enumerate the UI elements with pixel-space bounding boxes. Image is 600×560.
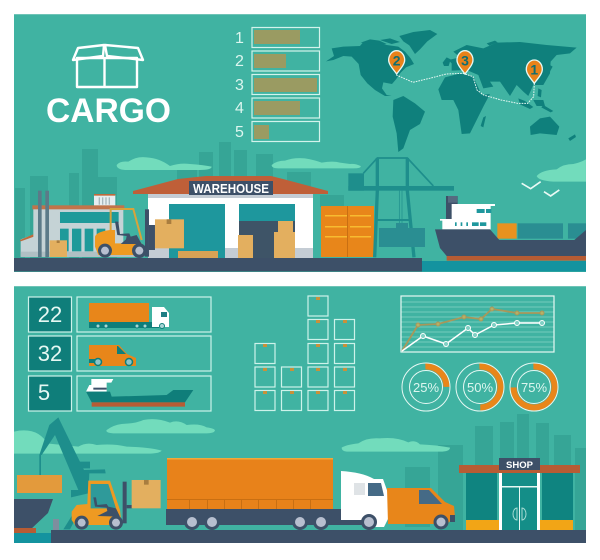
fleet table <box>28 297 211 411</box>
pin 2: 2 <box>393 52 401 68</box>
dock road bottom <box>51 530 586 543</box>
icon: cargo box <box>73 45 143 87</box>
ranked list <box>235 28 320 142</box>
shipping route <box>396 73 534 103</box>
fleet table: 22 <box>38 302 62 327</box>
donut 25% <box>402 363 450 411</box>
icon: ship <box>86 379 193 407</box>
square pictogram chart <box>255 296 354 410</box>
dockside crane <box>39 417 106 529</box>
panel: bottom fleet statistics and delivery scene <box>14 286 586 543</box>
donut 50%: 50% <box>467 380 493 395</box>
shop sign: SHOP <box>506 460 534 471</box>
water top <box>422 261 586 272</box>
van <box>387 488 455 530</box>
ranked list: 5 <box>235 124 244 141</box>
city skyline bottom <box>405 414 586 538</box>
ranked list: 1 <box>235 30 244 47</box>
pin 1 <box>526 60 542 83</box>
forklift bottom <box>72 480 161 530</box>
dock road top <box>14 258 422 272</box>
forklift top <box>95 209 184 258</box>
pin 3: 3 <box>461 52 469 68</box>
cloud right <box>537 159 586 182</box>
ship top <box>435 196 586 261</box>
truck <box>166 458 388 530</box>
cloud middle <box>272 158 361 168</box>
icon: truck <box>89 303 169 328</box>
orange container <box>321 206 374 257</box>
world map <box>326 30 577 152</box>
hanging container <box>379 223 425 247</box>
birds <box>522 182 559 196</box>
donut 25%: 25% <box>413 380 439 395</box>
cloud bottom right <box>342 438 450 452</box>
stacked boxes <box>238 221 295 258</box>
title: CARGO: CARGO <box>46 92 171 130</box>
warehouse sign: WAREHOUSE <box>193 181 269 196</box>
donut 50% <box>456 363 504 411</box>
water bottom <box>14 533 51 543</box>
bollard <box>53 519 59 530</box>
factory building <box>20 191 144 257</box>
port crane <box>348 158 454 257</box>
pin 1: 1 <box>530 62 538 78</box>
fleet table: 32 <box>38 341 62 366</box>
ranked list: 3 <box>235 77 244 94</box>
hanging container <box>17 475 62 493</box>
city skyline <box>15 142 344 258</box>
line chart <box>401 296 554 352</box>
pallet <box>178 251 218 258</box>
icon: van <box>89 345 136 366</box>
ranked list: 4 <box>235 100 244 117</box>
ship bow <box>14 499 53 534</box>
pin 3 <box>457 51 473 74</box>
cloud bottom left <box>14 430 162 454</box>
cloud bottom centre <box>106 419 215 433</box>
donut 75%: 75% <box>521 380 547 395</box>
donut 75% <box>510 363 558 411</box>
pin 2 <box>389 51 405 74</box>
panel: top warehouse and shipping scene <box>14 14 586 272</box>
fleet table: 5 <box>38 380 50 405</box>
shop <box>459 458 580 530</box>
ranked list: 2 <box>235 53 244 70</box>
warehouse <box>133 176 328 258</box>
cloud left <box>117 157 212 170</box>
